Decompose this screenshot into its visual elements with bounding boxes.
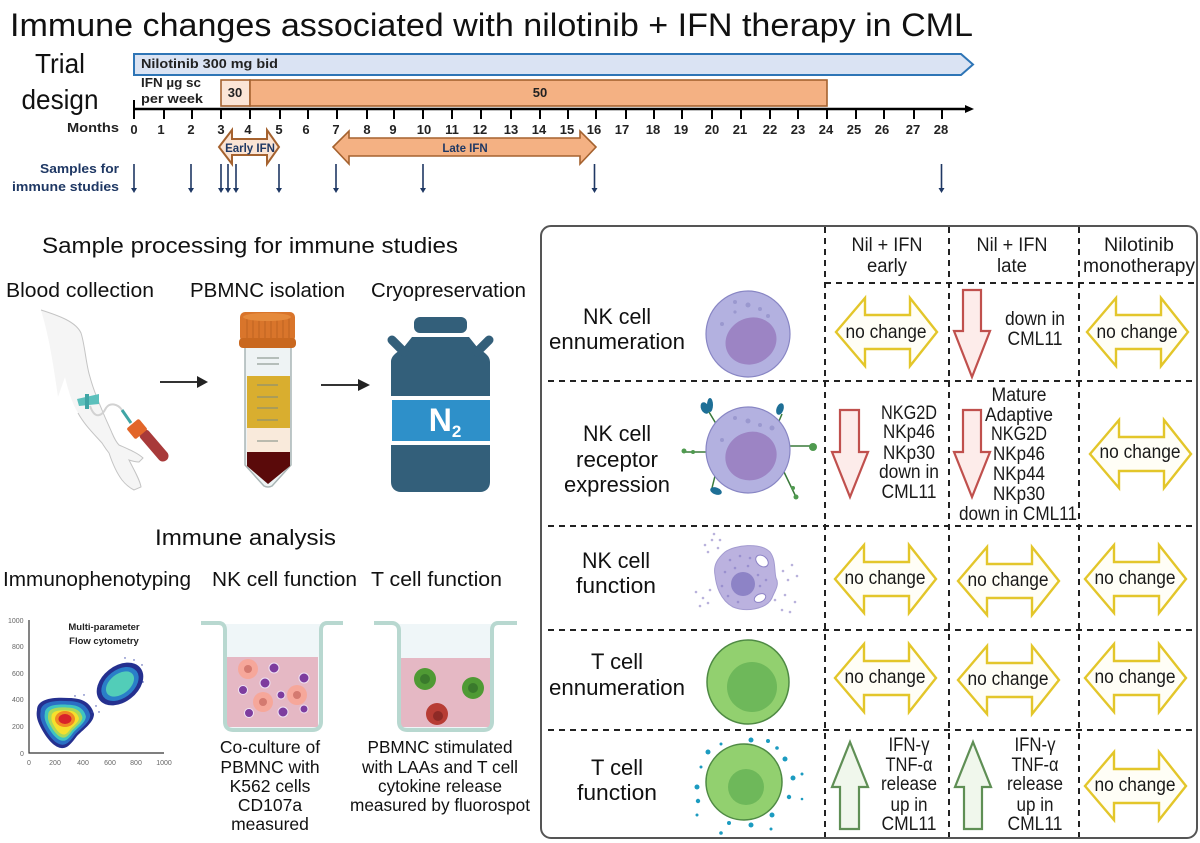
- timeline axis: 17: [615, 122, 629, 137]
- arrow: row 2 late down: NKp46: [993, 444, 1045, 465]
- heading: immune analysis: Immune analysis: [155, 525, 336, 550]
- timeline axis: 15: [560, 122, 574, 137]
- chart: flow cytometry: Flow cytometry: [69, 636, 140, 647]
- arrow: row 2 late down: down in CML11: [959, 504, 1077, 525]
- arrow: row 2 late down: NKp44: [993, 464, 1045, 485]
- timeline axis: 16: [587, 122, 601, 137]
- chart: flow cytometry: 1000: [156, 760, 172, 767]
- caption: NK cell function: CD107a: [238, 795, 302, 815]
- arrow: row 2 late down: NKG2D: [991, 424, 1047, 445]
- arrow: row 5 late up: [955, 735, 1063, 835]
- row label: T cell function: function: [577, 780, 657, 805]
- arrow: row 5 early up: TNF-α: [886, 755, 933, 776]
- arrow: row 2 mono no change: no change: [1100, 442, 1180, 463]
- arrow: row 2 late down: Adaptive: [985, 405, 1053, 426]
- row label: T cell function: [577, 755, 657, 805]
- arrow: row 2 early down: down in: [879, 462, 939, 483]
- caption: T cell function: with LAAs and T cell: [361, 757, 518, 777]
- icon: T cell releasing cytokines: [694, 738, 804, 835]
- row label: NK cell receptor expression: receptor: [576, 447, 658, 472]
- arrow: row 4 mono no change: [1085, 644, 1186, 712]
- arrow: row 5 mono no change: no change: [1094, 775, 1176, 796]
- icon: nitrogen dewar: N: [429, 402, 452, 438]
- arrow: row 1 mono no change: [1087, 298, 1188, 366]
- caption: NK cell function: PBMNC with: [220, 757, 320, 777]
- arrow: row 4 late no change: no change: [968, 669, 1048, 690]
- timeline axis: 5: [275, 122, 283, 137]
- timeline axis: Months: [67, 120, 119, 135]
- arrow: row 2 early down: CML11: [882, 482, 936, 503]
- label: PBMNC isolation: PBMNC isolation: [190, 280, 345, 302]
- row label: NK cell receptor expression: [564, 421, 670, 497]
- timeline axis: 14: [532, 122, 547, 137]
- row label: NK cell receptor expression: expression: [564, 472, 670, 497]
- arrow: row 2 late down: NKp30: [993, 484, 1045, 505]
- sample arrows: [131, 164, 944, 193]
- bar: IFN 30: 30: [228, 85, 242, 100]
- timeline axis: 21: [733, 122, 747, 137]
- arrow: row 5 late up: TNF-α: [1012, 755, 1059, 776]
- column headers: [852, 235, 1196, 277]
- row label: NK cell function: [576, 548, 656, 598]
- timeline axis: 20: [705, 122, 719, 137]
- timeline axis: 24: [819, 122, 834, 137]
- arrow: row 5 late up: up in: [1016, 795, 1054, 816]
- arrow: row 2 early down: NKp30: [883, 443, 935, 464]
- icon: nitrogen dewar: [391, 317, 490, 492]
- column headers: monotherapy: [1083, 256, 1196, 277]
- row label: T cell ennumeration: [549, 649, 685, 700]
- arrow: row 5 early up: release: [881, 774, 937, 795]
- timeline axis: 7: [332, 122, 340, 137]
- timeline axis: 22: [763, 122, 777, 137]
- row label: NK cell ennumeration: NK cell: [583, 304, 651, 329]
- label: cryopreservation: Cryopreservation: [371, 280, 526, 302]
- title: Immune changes associated with nilotinib + IFN therapy in CML: [10, 7, 973, 43]
- caption: T cell function: measured by fluorospot: [350, 795, 530, 815]
- chart: flow cytometry: 600: [104, 760, 116, 767]
- panel: results table: [541, 226, 1197, 838]
- arrow: early IFN: [219, 130, 279, 164]
- column headers: Nil + IFN: [976, 235, 1048, 256]
- arrow: row 2 mono no change: [1090, 420, 1191, 488]
- arrow: row 5 late up: release: [1007, 774, 1063, 795]
- bar: nilotinib: Nilotinib 300 mg bid: [141, 56, 278, 71]
- well: T cell function: [374, 623, 517, 730]
- chart: flow cytometry: Multi-parameter: [68, 622, 140, 633]
- arrow: row 5 mono no change: [1085, 752, 1186, 820]
- label: blood collection: Blood collection: [6, 280, 154, 302]
- row label: NK cell ennumeration: [549, 304, 685, 354]
- chart: flow cytometry: 0: [20, 751, 24, 758]
- label: T cell function: T cell function: [371, 569, 502, 591]
- chart: flow cytometry: 200: [49, 760, 61, 767]
- timeline axis: 25: [847, 122, 861, 137]
- arrow: row 5 late up: CML11: [1008, 814, 1062, 835]
- timeline axis: [67, 100, 974, 137]
- timeline axis: 0: [130, 122, 138, 137]
- timeline axis: 26: [875, 122, 889, 137]
- caption: T cell function: cytokine release: [378, 776, 502, 796]
- arrow: row 5 early up: CML11: [882, 814, 936, 835]
- label: samples: Samples for: [40, 161, 119, 176]
- chart: flow cytometry: 800: [12, 644, 24, 651]
- chart: flow cytometry: 600: [12, 671, 24, 678]
- arrow: row 5 early up: IFN-γ: [888, 735, 930, 756]
- arrow: late IFN: [333, 131, 596, 164]
- chart: flow cytometry: [8, 618, 172, 767]
- bar: IFN 50: [250, 80, 827, 106]
- panel: trial design: [12, 48, 974, 194]
- arrow: row 2 early down: NKp46: [883, 422, 935, 443]
- caption: NK cell function: K562 cells: [230, 776, 311, 796]
- icon: nitrogen dewar: 2: [452, 422, 461, 441]
- arrow: row 2 late down: [954, 385, 1077, 525]
- arrow: to cryopreservation: [321, 379, 370, 391]
- arrow: to isolation: [160, 376, 208, 388]
- timeline axis: 10: [417, 122, 431, 137]
- arrow: row 3 mono no change: [1085, 545, 1186, 613]
- row label: NK cell receptor expression: NK cell: [583, 421, 651, 446]
- timeline axis: 4: [244, 122, 252, 137]
- arrow: row 3 mono no change: no change: [1094, 568, 1176, 589]
- heading: trial design: design: [22, 84, 98, 115]
- chart: flow cytometry: 800: [130, 760, 142, 767]
- chart: flow cytometry: 400: [77, 760, 89, 767]
- row label: T cell function: T cell: [591, 755, 643, 780]
- heading: sample processing: Sample processing for immune studies: [42, 233, 458, 258]
- timeline axis: 12: [473, 122, 487, 137]
- arrow: row 4 early no change: [835, 644, 936, 712]
- heading: trial design: [22, 48, 98, 115]
- well: NK cell function: [201, 623, 343, 730]
- column headers: Nilotinib: [1104, 235, 1174, 256]
- timeline axis: 28: [934, 122, 948, 137]
- arrow: row 3 late no change: [958, 547, 1059, 615]
- timeline axis: 23: [791, 122, 805, 137]
- arrow: row 1 early no change: no change: [846, 322, 926, 343]
- arrow: row 1 late down: CML11: [1008, 329, 1062, 350]
- bar: IFN 50: 50: [533, 85, 547, 100]
- arrow: row 1 late down: down in: [1005, 309, 1065, 330]
- icon: degranulating NK cell: [695, 533, 798, 613]
- bar: IFN 30: [221, 80, 250, 106]
- arrow: row 2 early down: NKG2D: [881, 403, 937, 424]
- arrow: row 3 early no change: no change: [844, 568, 926, 589]
- label: IFN dose: IFN µg sc: [141, 75, 201, 90]
- timeline axis: 1: [157, 122, 165, 137]
- label: IFN dose: [141, 75, 204, 106]
- timeline axis: 9: [389, 122, 397, 137]
- row label: T cell ennumeration: T cell: [591, 649, 643, 674]
- arrow: early IFN: Early IFN: [225, 143, 275, 155]
- bar: nilotinib: [134, 54, 973, 75]
- label: samples: [12, 161, 119, 194]
- arrow: row 4 early no change: no change: [844, 667, 926, 688]
- chart: flow cytometry: 1000: [8, 618, 24, 625]
- icon: NK cell: [706, 291, 790, 377]
- timeline axis: 6: [302, 122, 310, 137]
- timeline axis: 11: [445, 122, 459, 137]
- icon: T cell: [707, 640, 789, 724]
- arrow: row 3 early no change: [835, 545, 936, 613]
- label: NK cell function: NK cell function: [212, 569, 357, 591]
- timeline axis: 27: [906, 122, 920, 137]
- label: immunophenotyping: Immunophenotyping: [3, 569, 191, 591]
- arrow: row 1 late down: [954, 290, 1065, 377]
- arrow: row 5 late up: IFN-γ: [1014, 735, 1056, 756]
- arrow: late IFN: Late IFN: [442, 143, 488, 155]
- timeline axis: 8: [363, 122, 371, 137]
- arrow: row 4 late no change: [958, 646, 1059, 714]
- timeline axis: 18: [646, 122, 660, 137]
- row label: NK cell ennumeration: ennumeration: [549, 329, 685, 354]
- column headers: Nil + IFN: [852, 235, 922, 256]
- arrow: row 4 mono no change: no change: [1094, 667, 1176, 688]
- arrow: row 1 early no change: [836, 298, 937, 366]
- row label: NK cell function: function: [576, 573, 656, 598]
- arrow: row 1 mono no change: no change: [1096, 322, 1178, 343]
- chart: flow cytometry: 200: [12, 724, 24, 731]
- arrow: row 3 late no change: no change: [968, 570, 1048, 591]
- arrow: row 2 early down: [832, 403, 939, 503]
- timeline axis: 3: [217, 122, 225, 137]
- column headers: early: [867, 256, 907, 277]
- icon: centrifuge tube: [239, 312, 296, 487]
- icon: arm with blood draw: [41, 310, 163, 490]
- caption: NK cell function: measured: [231, 814, 309, 834]
- label: samples: immune studies: [12, 179, 119, 194]
- chart: flow cytometry: 400: [12, 697, 24, 704]
- column headers: late: [997, 256, 1027, 277]
- icon: NK cell with receptors: [682, 398, 817, 500]
- label: IFN dose: per week: [141, 91, 204, 106]
- caption: T cell function: [350, 737, 530, 815]
- arrow: row 5 early up: up in: [890, 795, 928, 816]
- chart: flow cytometry: 0: [27, 760, 31, 767]
- row label: T cell ennumeration: ennumeration: [549, 675, 685, 700]
- caption: T cell function: PBMNC stimulated: [368, 737, 512, 757]
- timeline axis: 2: [187, 122, 195, 137]
- caption: NK cell function: Co-culture of: [220, 737, 320, 757]
- arrow: row 2 late down: Mature: [992, 385, 1046, 406]
- timeline axis: 13: [504, 122, 518, 137]
- timeline axis: 19: [674, 122, 688, 137]
- arrow: row 5 early up: [832, 735, 937, 835]
- caption: NK cell function: [220, 737, 320, 834]
- heading: trial design: Trial: [35, 48, 85, 79]
- row label: NK cell function: NK cell: [582, 548, 650, 573]
